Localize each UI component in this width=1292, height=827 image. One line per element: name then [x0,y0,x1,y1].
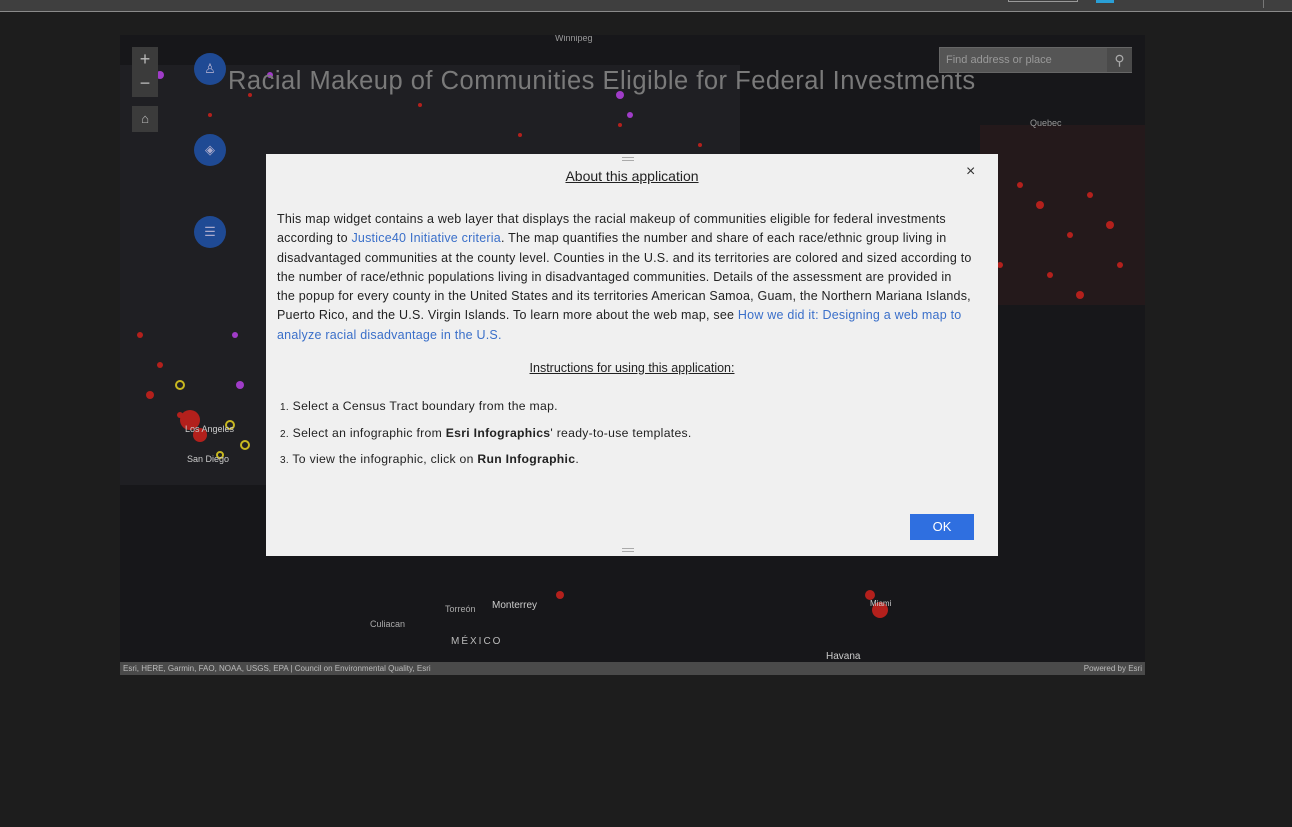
OK button: OK [933,519,951,534]
dialog heading: About this application [565,168,699,184]
title: Racial Makeup of Communities Eligible for Federal Investments [228,67,976,95]
map panel: MÉXICO [451,636,502,647]
map panel: Los Angeles [185,424,234,434]
home button: ⌂ [141,111,149,126]
OK button [910,514,974,540]
description: according to Justice40 Initiative criteria. The map quantifies the number and share of each race/ethnic group living in [277,231,946,245]
description [277,212,972,342]
map panel [120,35,1145,675]
description: Puerto Rico, and the U.S. Virgin Islands. To learn more about the web map, see How we did it: Designing a web map to [277,308,961,322]
description: the popup for every county in the United States and its territories American Samoa, Guam, the Northern Mariana Islands, [277,289,971,303]
map panel: Quebec [1030,118,1062,128]
home button [132,106,158,132]
description: This map widget contains a web layer that displays the racial makeup of communities eligible for federal investments [277,212,946,226]
search box: ⚲ [1114,52,1125,68]
zoom controls [132,47,158,97]
top bar [0,0,1292,12]
instructions list [280,399,692,466]
icon buttons: ♙ [204,61,216,76]
map panel: Culiacan [370,619,405,629]
search box: Find address or place [946,54,1052,66]
search box [939,47,1132,73]
map panel: Torreón [445,604,476,614]
zoom controls: + [140,49,150,69]
instructions list: 3. To view the infographic, click on Run Infographic. [280,452,579,466]
map panel: Monterrey [492,600,537,611]
map panel: San Diego [187,454,229,464]
close icon: × [966,163,975,180]
text: ◈ [205,142,215,157]
map panel: Havana [826,651,860,662]
icon buttons [194,53,226,85]
text: ☰ [204,224,216,239]
instructions list: 1. Select a Census Tract boundary from the map. [280,399,558,413]
attribution bar: Powered by Esri [1084,664,1142,673]
instructions list: 2. Select an infographic from Esri Infographics' ready-to-use templates. [280,426,692,440]
attribution bar [120,662,1145,675]
description: analyze racial disadvantage in the U.S. [277,328,502,342]
instructions heading: Instructions for using this application: [530,361,734,375]
modal dialog [266,154,998,556]
description: disadvantaged communities at the county level. Counties in the U.S. and its territories are colored and sized according to [277,251,972,265]
zoom controls: − [140,73,150,93]
map panel: Miami [870,599,891,608]
attribution bar: Esri, HERE, Garmin, FAO, NOAA, USGS, EPA | Council on Environmental Quality, Esri [123,664,431,673]
description: the number of race/ethnic populations living in disadvantaged communities. Details of the assessment are provided in [277,270,952,284]
